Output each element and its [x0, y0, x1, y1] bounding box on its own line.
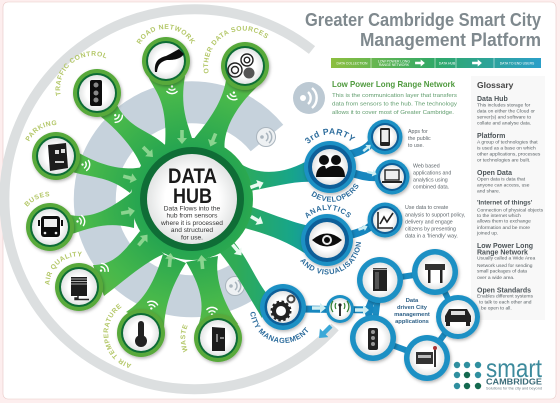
caption: apps: Apps for [408, 129, 428, 135]
connector arrows on city management [312, 142, 378, 315]
icon: network signal [293, 82, 325, 114]
label: road network: ROAD NETWORK [136, 24, 196, 44]
entry: open data: anyone can access, use [477, 184, 530, 188]
label: parking: PARKING [25, 120, 56, 142]
entry: low power long range network: Range Network [477, 250, 528, 256]
icon: upper signal badge [256, 128, 276, 146]
entry: internet of things [476, 200, 544, 236]
entry: data hub: collate and analyse data. [477, 120, 531, 126]
node: air temperature [117, 309, 165, 357]
inbound flow arrows [120, 130, 220, 269]
process banner [331, 58, 541, 68]
process banner: DATA HUB [439, 62, 456, 66]
caption: web applications: analytics using [413, 178, 448, 184]
label: waste: WASTE [180, 324, 188, 352]
entry: low power long range network: over a wide area. [477, 275, 515, 281]
inner blue-grey data band [95, 102, 267, 296]
teal hub branches to outputs [214, 158, 316, 318]
outbound flow arrows [229, 178, 266, 259]
entry: internet of things: Connection of physical objects [477, 208, 544, 214]
panel: glossary [476, 80, 544, 312]
node: antenna [326, 295, 354, 323]
entry: platform: other applications, processes [477, 152, 541, 158]
hub title: DATA [168, 165, 217, 188]
label: other data sources: OTHER DATA SOURCES [203, 26, 268, 74]
icon: lower signal badge [226, 276, 244, 296]
node: traffic control [73, 69, 121, 117]
signal symbols on sensor branches [75, 85, 239, 316]
caption: web applications: Web based [413, 164, 440, 170]
node: city management gear [260, 284, 306, 330]
entry: internet of things: joined up. [476, 230, 498, 236]
entry: data hub: data on either the Cloud or [477, 108, 535, 114]
green sensor branches [70, 76, 258, 328]
entry: open standards: Open Standards [477, 288, 531, 294]
smart cambridge logo: smart [486, 353, 543, 383]
entry: open data: Open Data [477, 170, 512, 177]
entry: low power long range network: Low Power Long [477, 243, 533, 250]
entry: data hub: Data Hub [477, 96, 508, 103]
entry: open data [477, 170, 530, 194]
entry: platform: Platform [477, 133, 505, 140]
hub description: where it is processed [160, 220, 223, 227]
hub description [160, 206, 223, 242]
node: analytics eye [301, 214, 353, 266]
node: air quality [55, 263, 103, 311]
node: web laptop [374, 160, 410, 194]
node: parking meter [404, 335, 450, 381]
low power network text: This is the communication layer that transfers [332, 93, 457, 99]
entry: internet of things: 'Internet of things' [477, 200, 533, 206]
smart cambridge logo: Solutions for the city and beyond [486, 386, 542, 390]
node: third party developers [304, 141, 356, 193]
blue connector links [300, 142, 457, 358]
caption: apps: the public [408, 136, 431, 142]
label: traffic control: TRAFFIC CONTROL [55, 51, 106, 96]
caption: web applications: applications and [413, 170, 451, 176]
caption: apps [408, 129, 431, 149]
process banner: RANGE NETWORK [379, 63, 410, 67]
entry: low power long range network: Usually called a Wide Area [477, 256, 535, 262]
data hub [131, 138, 253, 260]
entry: open data: and share. [477, 188, 500, 194]
entry: low power long range network: Network used for sending [477, 263, 533, 269]
caption: analytics: delivery and engage [405, 220, 453, 226]
low power network text [332, 79, 457, 116]
node: chart [368, 202, 402, 238]
label: air temperature: AIR TEMPERATURE [103, 304, 132, 368]
entry: open standards: Enables different systems [477, 294, 533, 300]
entry: platform [477, 133, 541, 164]
entry: open standards: to talk to each other and [479, 300, 532, 306]
hub description: Data Flows into the [164, 206, 221, 212]
node: car [436, 295, 480, 339]
process banner: DATA TO END USERS [500, 62, 535, 66]
process banner: LOW POWER LONG [378, 60, 410, 64]
entry: open standards: be open to all. [481, 306, 512, 312]
entry: data hub [477, 96, 535, 126]
outer grey ring [4, 9, 335, 389]
hub title second line: HUB [173, 185, 212, 208]
label: 3rd party: 3rd PARTY [305, 128, 356, 144]
entry: open standards [477, 288, 533, 312]
caption: data driven applications: Data [406, 298, 419, 304]
node: waste [194, 314, 242, 362]
entry: data hub: This includes storage for [477, 102, 531, 108]
caption: analytics: citizens by presenting [405, 226, 456, 232]
node: city traffic light [350, 315, 396, 361]
entry: low power long range network [477, 243, 535, 281]
low power network text: data from sensors to the hub. The technology [332, 102, 457, 108]
low power network text: Low Power Long Range Network [332, 79, 455, 89]
entry: open data: Open data is data that [477, 176, 526, 182]
node: road sign [412, 249, 458, 295]
entry: internet of things: allows them to exchange [477, 218, 531, 224]
hub description: and structured [171, 227, 213, 234]
node: parking [32, 132, 80, 180]
hub description: hub from sensors [167, 213, 218, 220]
entry: platform: A group of technologies that [477, 140, 538, 146]
caption: analytics: analysis to support policy, [405, 212, 465, 218]
smart cambridge logo: CAMBRIDGE [486, 378, 543, 386]
label: analytics: ANALYTICS [305, 204, 351, 218]
arrow: return to ring [315, 322, 335, 342]
caption: web applications: combined data. [413, 184, 449, 190]
title: Management Platform [360, 29, 541, 50]
entry: data hub: server(s) and software to [477, 114, 531, 120]
caption: analytics [405, 205, 465, 240]
caption: data driven applications [394, 298, 430, 325]
node: other data sources [221, 42, 269, 90]
caption: data driven applications: management [394, 312, 430, 318]
label: developers: DEVELOPERS [311, 184, 358, 202]
entry: internet of things: to the internet which [477, 213, 521, 219]
node: buses [26, 203, 74, 251]
label: and visualisation: AND VISUALISATION [300, 242, 362, 274]
label: city management: CITY MANAGEMENT [250, 312, 308, 343]
label: buses: BUSES [24, 192, 50, 207]
label: air quality: AIR QUALITY [44, 252, 82, 285]
low power network text: allows it to cover most of Greater Cambridge. [332, 110, 454, 116]
caption: data driven applications: driven City [397, 305, 428, 311]
node: street cabinet [357, 257, 403, 303]
title [305, 9, 542, 50]
caption: web applications [413, 164, 451, 190]
caption: apps: to use. [408, 143, 424, 149]
glossary heading: Glossary [477, 80, 514, 90]
caption: data driven applications: applications [395, 319, 429, 325]
entry: internet of things: information and be more [477, 225, 530, 231]
entry: low power long range network: small packages of data [477, 268, 527, 274]
entry: platform: or technologies are built. [477, 158, 530, 164]
caption: analytics: data in a 'friendly' way. [405, 234, 458, 240]
smart cambridge logo [454, 353, 543, 390]
node: road network [142, 37, 190, 85]
caption: analytics: Use data to create [405, 205, 448, 211]
entry: platform: is used as a base on which [477, 146, 536, 152]
hub description: for use. [181, 234, 203, 242]
glossary background [471, 76, 545, 320]
node: phone apps [368, 120, 402, 154]
process banner: DATA COLLECTION [337, 62, 368, 66]
